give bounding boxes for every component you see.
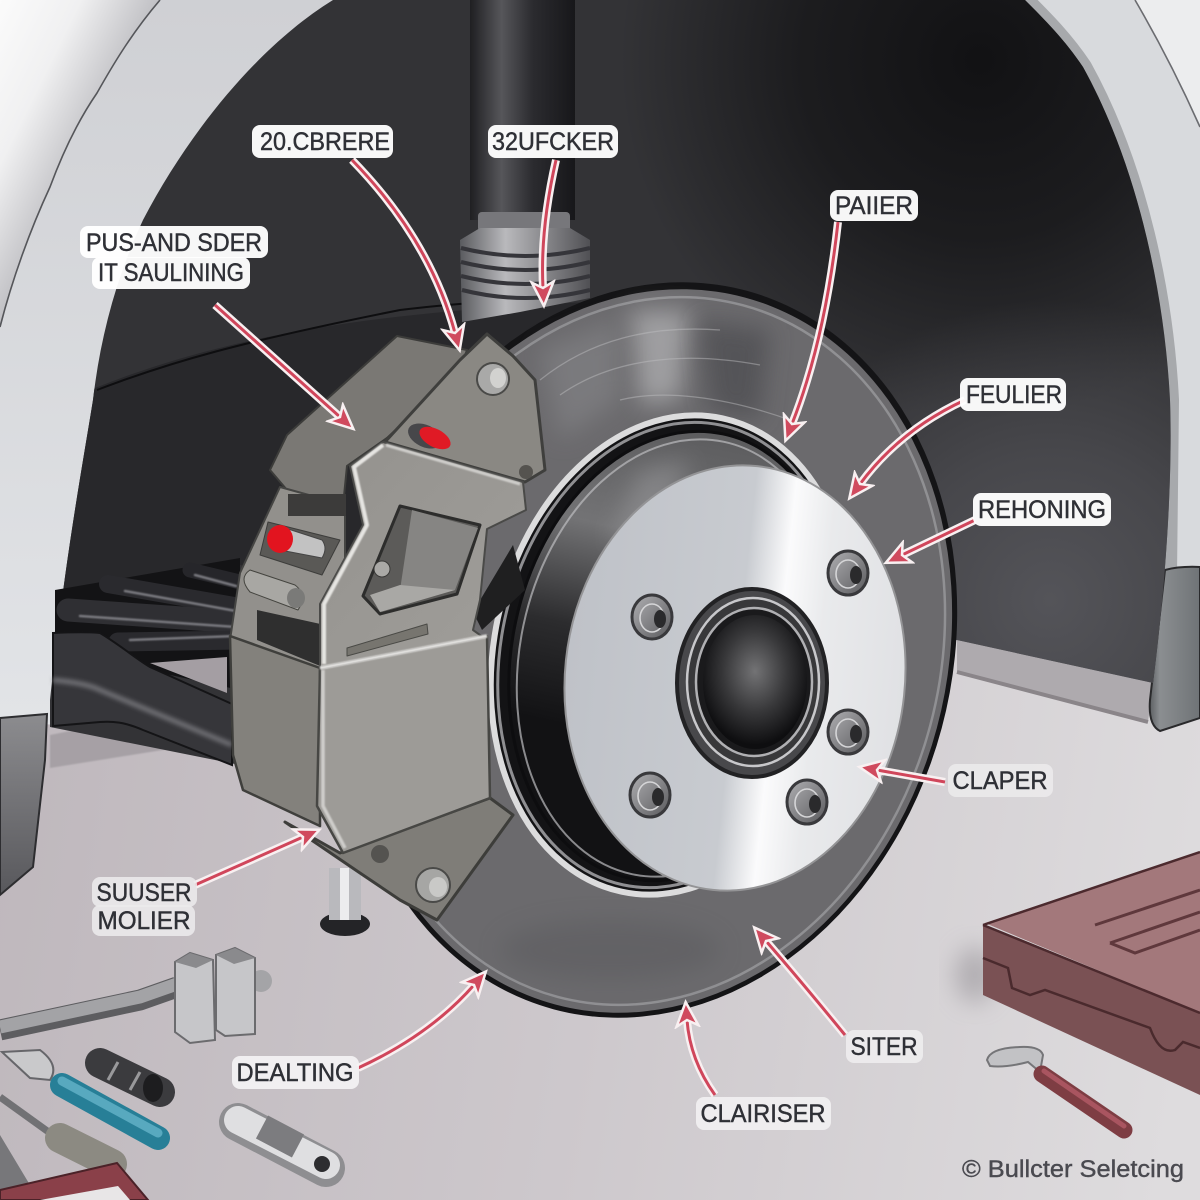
floor shadow under suspension arm bbox=[50, 725, 175, 768]
label: PUS-AND SDER IT SAULINING bbox=[80, 226, 268, 289]
arrow: SUUSER to pad bbox=[195, 837, 303, 885]
arrow: top left label to caliper bbox=[352, 160, 455, 333]
hub plate bbox=[544, 448, 926, 908]
label: SUUSER MOLIER bbox=[92, 877, 197, 936]
caliper foot post bbox=[320, 868, 370, 936]
label: CLAPER: CLAPER bbox=[952, 767, 1048, 795]
wheel studs bbox=[630, 551, 868, 824]
pistons bbox=[244, 525, 325, 610]
label: SITER: SITER bbox=[850, 1033, 918, 1061]
tool: breaker bar with clamp blocks bbox=[0, 948, 272, 1043]
main casting bbox=[320, 442, 526, 668]
tool: screwdriver bbox=[0, 1097, 112, 1200]
brake rotor bbox=[262, 213, 1038, 1087]
left fender lower skirt bbox=[0, 714, 47, 895]
arrow: top centre label to strut bbox=[543, 160, 556, 288]
caliper bbox=[230, 334, 545, 936]
tool: silver socket bbox=[238, 1120, 330, 1172]
arrow: PAIIER to rotor bbox=[792, 222, 838, 424]
rear housing bbox=[270, 336, 467, 506]
left frame bbox=[230, 487, 345, 680]
arrow: REHONING to hub bbox=[902, 520, 975, 555]
left pad block bbox=[230, 636, 320, 826]
upper bracket bolt bbox=[477, 363, 509, 395]
tool: small red hook wrench bbox=[987, 1047, 1124, 1130]
copyright text: © Bullcter Seletcing bbox=[962, 1156, 1184, 1183]
label: REHONING: REHONING bbox=[978, 496, 1106, 524]
tool: blue handled wrench bbox=[2, 1050, 158, 1138]
arrow: FEULIER to hub bbox=[860, 400, 965, 484]
arrow: left label to housing bbox=[215, 305, 340, 417]
suspension arms and cables bbox=[53, 558, 240, 765]
label: PAIIER: PAIIER bbox=[835, 192, 913, 220]
arrow: CLAPER to hub bbox=[877, 770, 945, 782]
label: SUUSER MOLIER: SUUSER bbox=[96, 879, 192, 907]
upper bracket plate bbox=[385, 334, 545, 482]
rotor hat ring bbox=[448, 381, 896, 929]
right fender bbox=[1020, 0, 1200, 731]
rotor clamp wedge bbox=[473, 545, 525, 630]
lower bracket bolt bbox=[416, 868, 450, 902]
strut rubber boot bbox=[460, 212, 590, 322]
label: PUS-AND SDER IT SAULINING: IT SAULINING bbox=[98, 259, 244, 287]
label: PUS-AND SDER IT SAULINING: PUS-AND SDER bbox=[86, 229, 262, 257]
lower bracket plate bbox=[285, 798, 513, 920]
arrow: CLAIRISER to rotor edge bbox=[687, 1020, 715, 1095]
left fender bbox=[0, 0, 345, 895]
label: FEULIER: FEULIER bbox=[966, 381, 1062, 409]
hub bore bbox=[677, 589, 827, 777]
tool: dark socket bbox=[100, 1062, 163, 1102]
label: 32UFCKER: 32UFCKER bbox=[492, 128, 614, 156]
front pad block bbox=[317, 636, 490, 853]
red indicator bbox=[404, 418, 454, 454]
fender outer corner bbox=[0, 0, 160, 327]
wheel arch interior bbox=[50, 0, 1171, 764]
right fender lower skirt bbox=[1150, 567, 1200, 731]
arrow: DEALTING to rotor edge bbox=[358, 985, 474, 1068]
label: 20.CBRERE: 20.CBRERE bbox=[260, 128, 390, 156]
label: DEALTING: DEALTING bbox=[236, 1059, 354, 1087]
arrow: SITER to rotor bbox=[766, 941, 845, 1035]
callout arrows bbox=[195, 160, 975, 1095]
tool: red case corner bbox=[0, 1163, 148, 1200]
label: SUUSER MOLIER: MOLIER bbox=[98, 907, 190, 935]
floor strip under right wall bbox=[957, 640, 1153, 722]
brown tool case bbox=[955, 852, 1200, 1095]
casting slot bbox=[347, 624, 428, 656]
strut column bbox=[460, 0, 590, 322]
label: CLAIRISER: CLAIRISER bbox=[700, 1100, 826, 1128]
caliper window bbox=[363, 506, 480, 614]
